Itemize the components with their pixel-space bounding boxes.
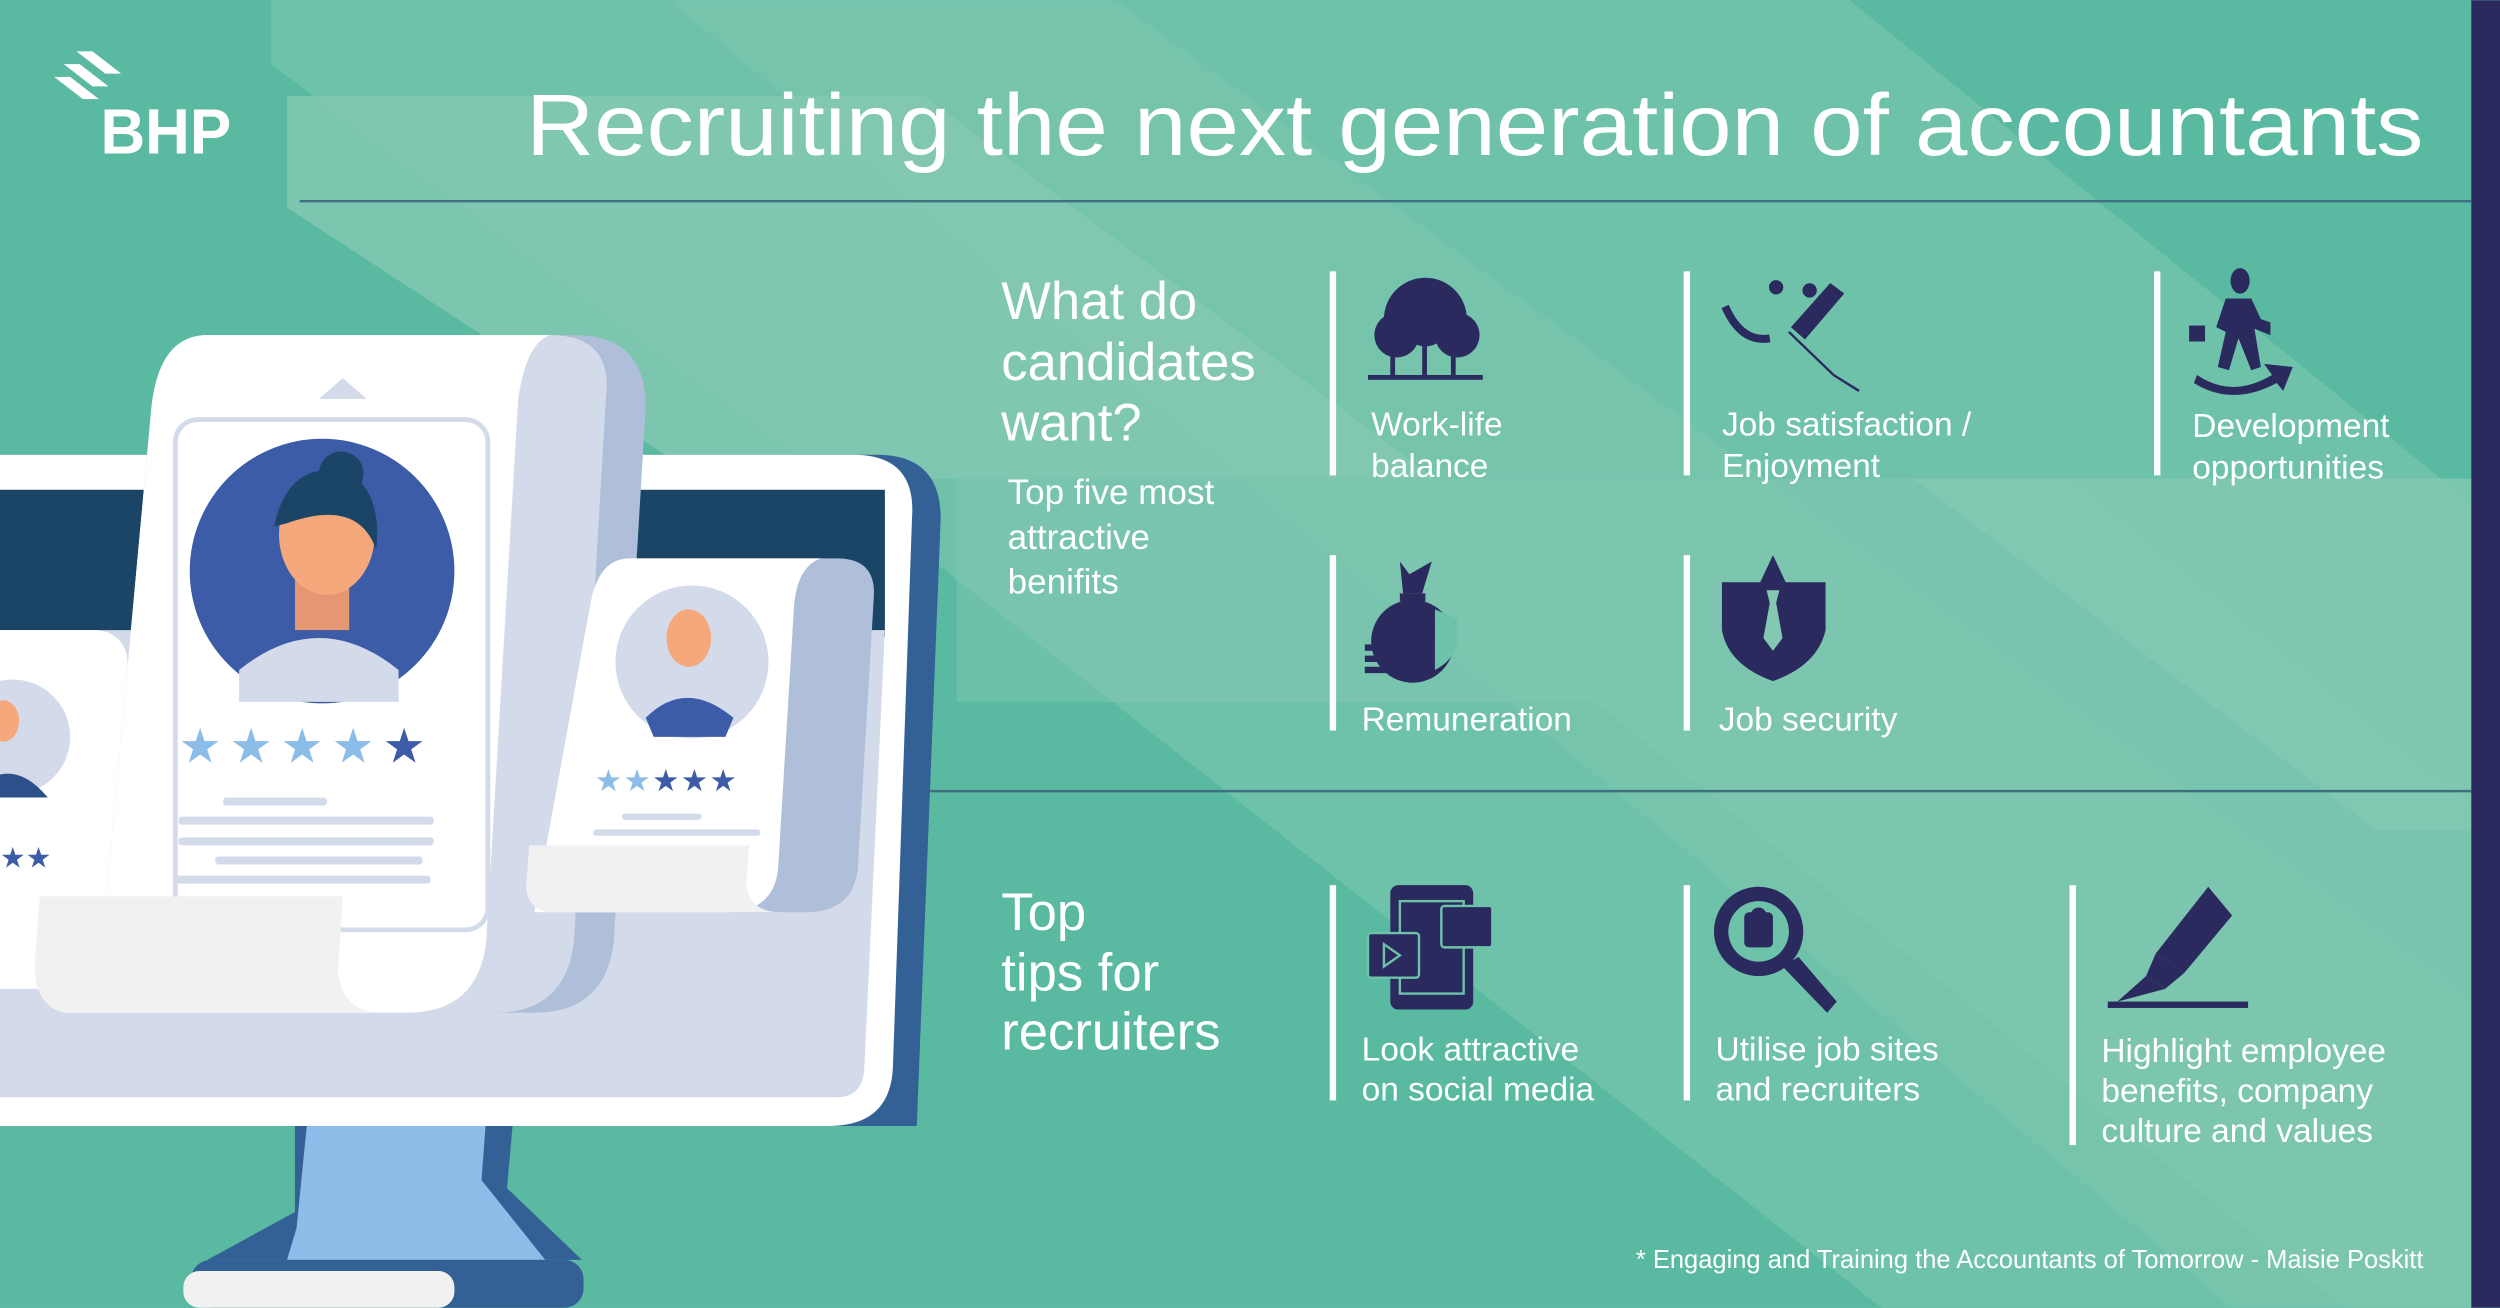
subheading: Top five most xyxy=(1008,473,1214,512)
logo: BHP xyxy=(54,51,231,167)
item: work-life balance: balance xyxy=(1371,448,1488,485)
big card: ★ xyxy=(230,720,272,773)
item: job security: Job security xyxy=(1719,702,1898,739)
small card: ★ xyxy=(652,765,679,798)
heading: top tips for recruiters: recruiters xyxy=(1001,1002,1221,1061)
heading: top tips for recruiters xyxy=(1001,883,1221,1061)
item: job satisfaction xyxy=(1684,271,1972,485)
big card xyxy=(35,335,646,1013)
monitor stand xyxy=(207,1116,582,1260)
subheading xyxy=(1008,473,1214,601)
tip: social media: on social media xyxy=(1362,1071,1595,1108)
tip: highlight benefits xyxy=(2070,885,2386,1150)
item: job security xyxy=(1684,555,1898,739)
big card: ★ xyxy=(281,720,324,773)
heading: top tips for recruiters: Top xyxy=(1001,883,1086,942)
small card: ★ xyxy=(681,765,708,798)
tip: highlight benefits: culture and values xyxy=(2101,1113,2373,1150)
item: job satisfaction: Enjoyment xyxy=(1722,448,1881,485)
item: remuneration: Remuneration xyxy=(1362,702,1572,739)
illustration: monitor with profile cards xyxy=(0,335,941,1308)
heading: what do candidates want xyxy=(1000,272,1256,452)
tip: job sites: Utilise job sites xyxy=(1716,1032,1939,1069)
subheading: attractive xyxy=(1008,518,1150,557)
item: development opportunities xyxy=(2154,268,2390,487)
big card: ★ xyxy=(383,720,426,773)
tip: job sites: and recruiters xyxy=(1716,1071,1920,1108)
small card: ★ xyxy=(623,765,651,798)
monitor frame xyxy=(0,455,941,1126)
item: job satisfaction: Job satisfaction / xyxy=(1722,407,1972,444)
heading: what do candidates want: candidates xyxy=(1001,333,1256,392)
small card: ★ xyxy=(595,765,622,798)
small card: ★ xyxy=(710,765,737,798)
left partial card: ★★ xyxy=(0,843,51,875)
heading: what do candidates want: What do xyxy=(1001,272,1197,331)
logo: BHP: BHP xyxy=(100,95,231,167)
small card xyxy=(526,558,874,912)
item: development opportunities: Development xyxy=(2192,408,2390,445)
item: work-life balance xyxy=(1330,271,1503,485)
tip: job sites xyxy=(1684,885,1939,1108)
footnote: * Engaging and Training the Accountants of Tomorrow - Maisie Poskitt xyxy=(1636,1246,2423,1274)
item: remuneration xyxy=(1330,555,1572,739)
right navy bar xyxy=(2471,0,2500,1308)
tip: highlight benefits: benefits, company xyxy=(2101,1073,2373,1110)
tip: highlight benefits: Highlight employee xyxy=(2101,1033,2386,1070)
tip: social media: Look attractive xyxy=(1362,1032,1579,1069)
big card: ★ xyxy=(332,720,375,773)
heading: top tips for recruiters: tips for xyxy=(1001,943,1159,1002)
subheading: benifits xyxy=(1008,562,1119,601)
title: Recruiting the next generation of accountants xyxy=(526,76,2423,174)
item: development opportunities: opportunities xyxy=(2192,450,2384,487)
left partial card xyxy=(0,630,128,989)
heading: what do candidates want: want? xyxy=(1000,393,1142,452)
tip: social media xyxy=(1330,885,1595,1108)
big card: ★ xyxy=(179,720,221,773)
item: work-life balance: Work-life xyxy=(1371,407,1503,444)
